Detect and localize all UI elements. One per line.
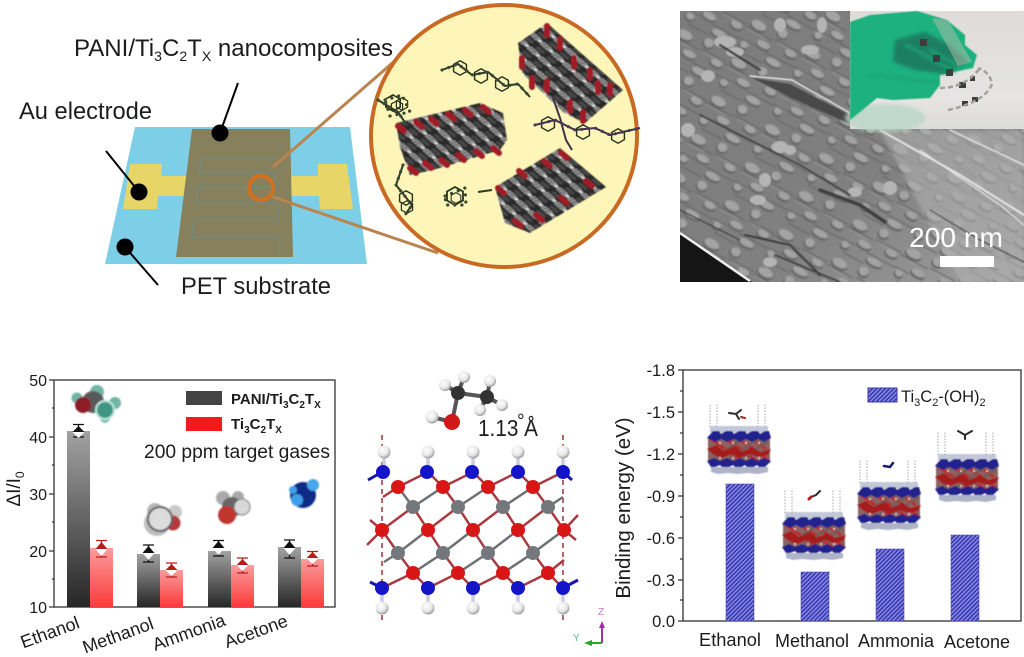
label: nanocomposites: 3 [154,48,162,64]
legend: C [250,416,261,433]
legend: C [920,388,932,406]
plot frame [54,380,335,607]
icon: acetone space-fill molecule [289,479,319,508]
bars [67,431,324,607]
y axis title: 0 [13,471,27,478]
legend: 2 [980,397,986,409]
coordinate axes: Z [598,607,604,618]
legend: X [275,425,282,436]
x axis labels: Acetone [221,611,290,652]
x axis labels: Ethanol [699,630,761,650]
periodic boundary lines [382,435,563,620]
y axis title: Binding energy (eV) [612,417,635,599]
inset structures [707,404,999,560]
hatched bars [726,484,979,621]
y axis ticks [49,380,54,607]
lighter strand band [880,130,1024,282]
PET substrate [105,127,367,264]
y axis tick labels: 0.0 [652,613,675,631]
distance label: ° [517,411,525,432]
legend: 3 [244,425,250,436]
distance label: 1.13 Å [478,414,539,441]
lattice atoms [375,446,571,614]
label: nanocomposites: T [187,35,202,62]
label: nanocomposites: C [162,35,179,62]
scale label: 200 nm [909,222,1003,253]
y axis tick labels: -1.2 [647,446,675,464]
plot frame [683,370,1021,621]
error bars and diamonds [72,424,318,577]
panel: adsorption structure [367,371,605,646]
legend: Ti [901,388,914,406]
coordinate axes [573,607,605,646]
y axis tick labels [29,373,47,617]
legend: PANI/Ti [231,391,283,408]
panel: device schematic [19,35,438,300]
panel: magnified molecular view [371,5,640,267]
panel: SEM micrograph with inset photo [680,11,1024,282]
zoom connector lines [273,58,438,253]
y axis tick labels: 30 [29,487,47,504]
icon: ammonia space-fill molecule [216,491,250,524]
x axis labels: Ethanol [18,613,82,652]
particle texture [680,11,1024,282]
label: nanocomposites: PANI/Ti [74,35,154,62]
legend: Ti [231,416,244,433]
x axis labels: Ammonia [858,631,935,651]
y axis ticks [678,370,683,621]
Au electrode pads [123,164,353,209]
y axis tick labels: 10 [29,600,47,617]
large particles [681,17,897,267]
y axis tick labels: 20 [29,544,47,561]
y axis title: ΔI/I [4,478,25,507]
legend: 2 [932,397,938,409]
callout pointers [106,83,238,285]
glove finger shadows [870,32,968,82]
PANI chains [378,61,640,215]
inset photo of flexible sensor [845,11,1024,132]
x axis labels [699,630,1010,652]
legend: 200 ppm target gases [144,442,330,463]
y axis tick labels: -0.3 [647,572,675,590]
label: Au electrode: Au electrode [19,98,152,125]
x axis labels: Methanol [80,613,156,657]
label: PET substrate: PET substrate [181,273,331,300]
coordinate axes: Y [573,633,580,644]
green glove [850,11,977,120]
fracture lines [680,45,1024,282]
label: nanocomposites: nanocomposites [211,35,393,62]
y axis tick labels [647,362,675,631]
y axis tick labels: 50 [29,373,47,390]
legend: T [266,416,275,433]
y axis tick labels: -0.6 [647,530,675,548]
y axis tick labels: 40 [29,430,47,447]
x axis labels: Ammonia [150,610,229,655]
legend [868,388,986,409]
panel: response bar chart [4,373,335,657]
scale bar [940,256,994,267]
x axis labels: Methanol [775,631,849,651]
x axis labels [18,610,290,657]
legend: C [289,391,300,408]
lattice bonds [367,452,578,608]
magnifier circle [371,5,637,267]
label: nanocomposites: 2 [179,48,187,64]
legend: 2 [299,400,305,411]
legend [144,391,330,463]
legend: X [314,400,321,411]
inset adsorbed molecules [729,410,972,499]
ethanol molecule [426,371,508,430]
dark wedge under ridge [752,78,850,124]
icon: ethanol space-fill molecule [72,385,121,423]
panel: binding energy bar chart [612,362,1021,652]
y axis tick labels: -0.9 [647,488,675,506]
legend: 3 [283,400,289,411]
dark corner of sample [680,234,752,282]
x axis labels: Acetone [944,632,1010,652]
legend: T [305,391,314,408]
nanosheet clusters [396,23,623,233]
SEM image [680,11,1024,282]
legend: 2 [260,425,266,436]
y axis tick labels: -1.5 [647,404,675,422]
legend: 3 [914,397,920,409]
PANI/Ti3C2Tx film with interdigitated pattern [176,129,293,257]
legend: -(OH) [938,388,980,406]
flexible film with electrodes [920,18,992,110]
icon: methanol space-fill molecule [144,503,182,536]
y axis tick labels: -1.8 [647,362,675,380]
zoom marker circle [249,176,273,200]
label: nanocomposites: X [202,48,212,64]
